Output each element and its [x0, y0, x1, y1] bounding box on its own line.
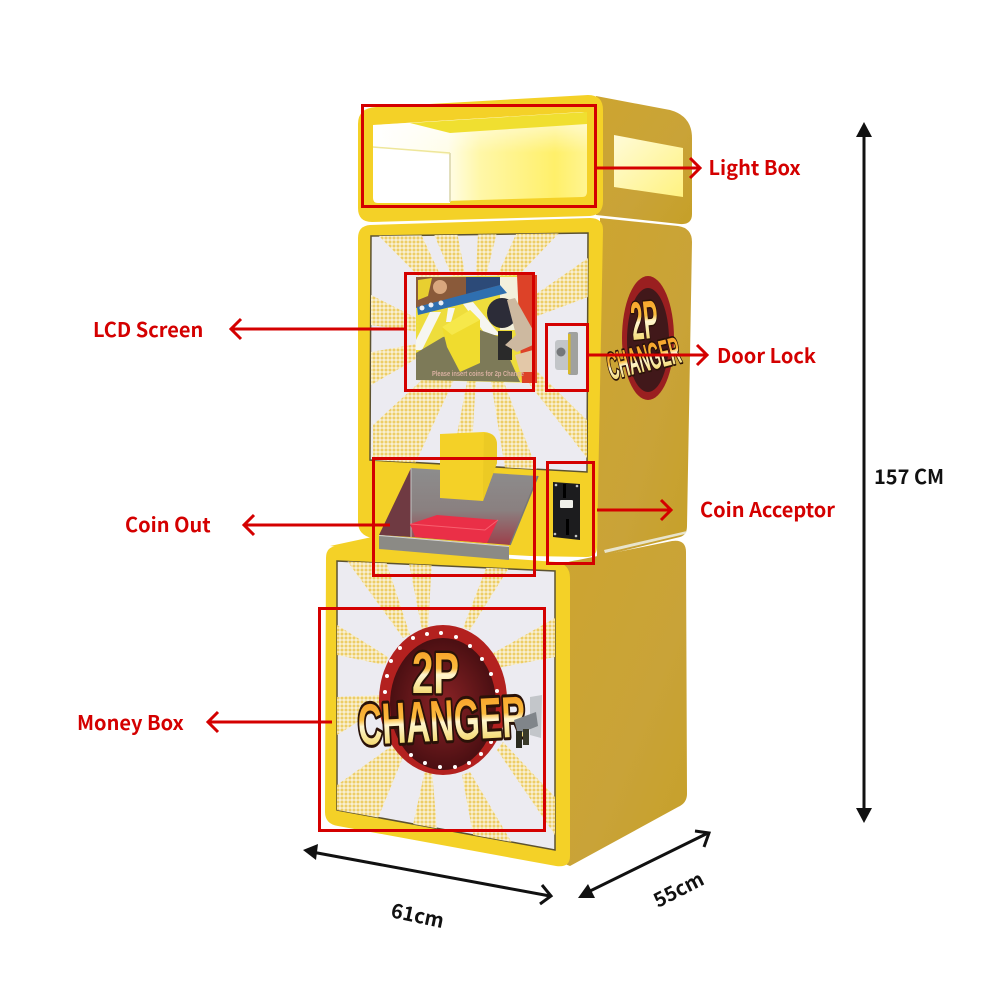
text: CHANGER [603, 330, 685, 389]
door lock [555, 332, 578, 375]
side logo: 2P Changer [603, 276, 685, 400]
arrow: depth dimension [578, 831, 709, 898]
light box [358, 95, 692, 224]
arrow: width dimension [303, 844, 551, 904]
arrow: coin out [244, 515, 390, 535]
label: Light Box: Light Box [708, 152, 801, 181]
arrow: money box [208, 712, 332, 732]
LCD screen image [416, 275, 537, 383]
LCD caption: Please insert coins for 2p Change [432, 369, 524, 378]
coin chute hood [440, 432, 497, 501]
front logo: 2P Changer: CHANGER [356, 684, 527, 758]
front logo: 2P Changer: 2P [412, 641, 459, 706]
red basket [410, 515, 498, 543]
lower cabinet top surface [330, 537, 560, 566]
label: LCD Screen: LCD Screen [93, 314, 203, 343]
arrow: LCD screen [231, 319, 405, 339]
arrow: height dimension [856, 122, 872, 823]
label: Door Lock: Door Lock [717, 340, 816, 369]
upper door graphic panel [370, 232, 588, 472]
label: Money Box: Money Box [77, 707, 184, 736]
front logo: 2P Changer [356, 625, 527, 775]
machine: yellow 2P changer cabinet [325, 95, 692, 866]
lower door graphic panel [337, 558, 555, 850]
side logo: 2P Changer: 2P [628, 289, 661, 352]
light box side window [614, 135, 683, 197]
lower cabinet [325, 541, 687, 866]
label: Coin Acceptor: Coin Acceptor [700, 494, 835, 523]
coin out tray [379, 468, 538, 560]
arrow: door lock [587, 345, 707, 365]
label: depth 55cm: 55cm [648, 863, 708, 913]
arrow: light box [595, 158, 700, 178]
middle cabinet [330, 218, 692, 566]
coin acceptor [553, 482, 580, 540]
arrow: coin acceptor [597, 500, 671, 520]
label: Coin Out: Coin Out [125, 509, 211, 538]
label: height 157 CM: 157 CM [874, 461, 944, 490]
light box front window [373, 112, 587, 203]
red highlight boxes [320, 106, 596, 830]
door lock with keys on lower door [514, 695, 542, 748]
label: width 61cm: 61cm [389, 895, 447, 934]
